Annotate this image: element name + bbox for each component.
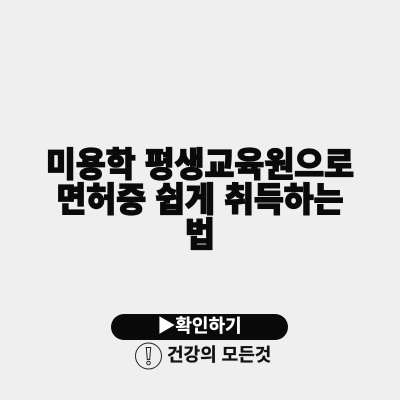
button: confirm	[111, 314, 288, 340]
title: 면허증 쉽게 취득하는	[56, 181, 344, 219]
button: confirm: ▶확인하기	[157, 316, 242, 336]
icon: warning circle	[135, 342, 162, 370]
title	[46, 146, 354, 254]
brand name: 건강의 모든것	[167, 345, 271, 365]
footer brand	[135, 342, 271, 370]
title: 미용학 평생교육원으로	[46, 146, 354, 184]
title: 법	[185, 216, 215, 254]
